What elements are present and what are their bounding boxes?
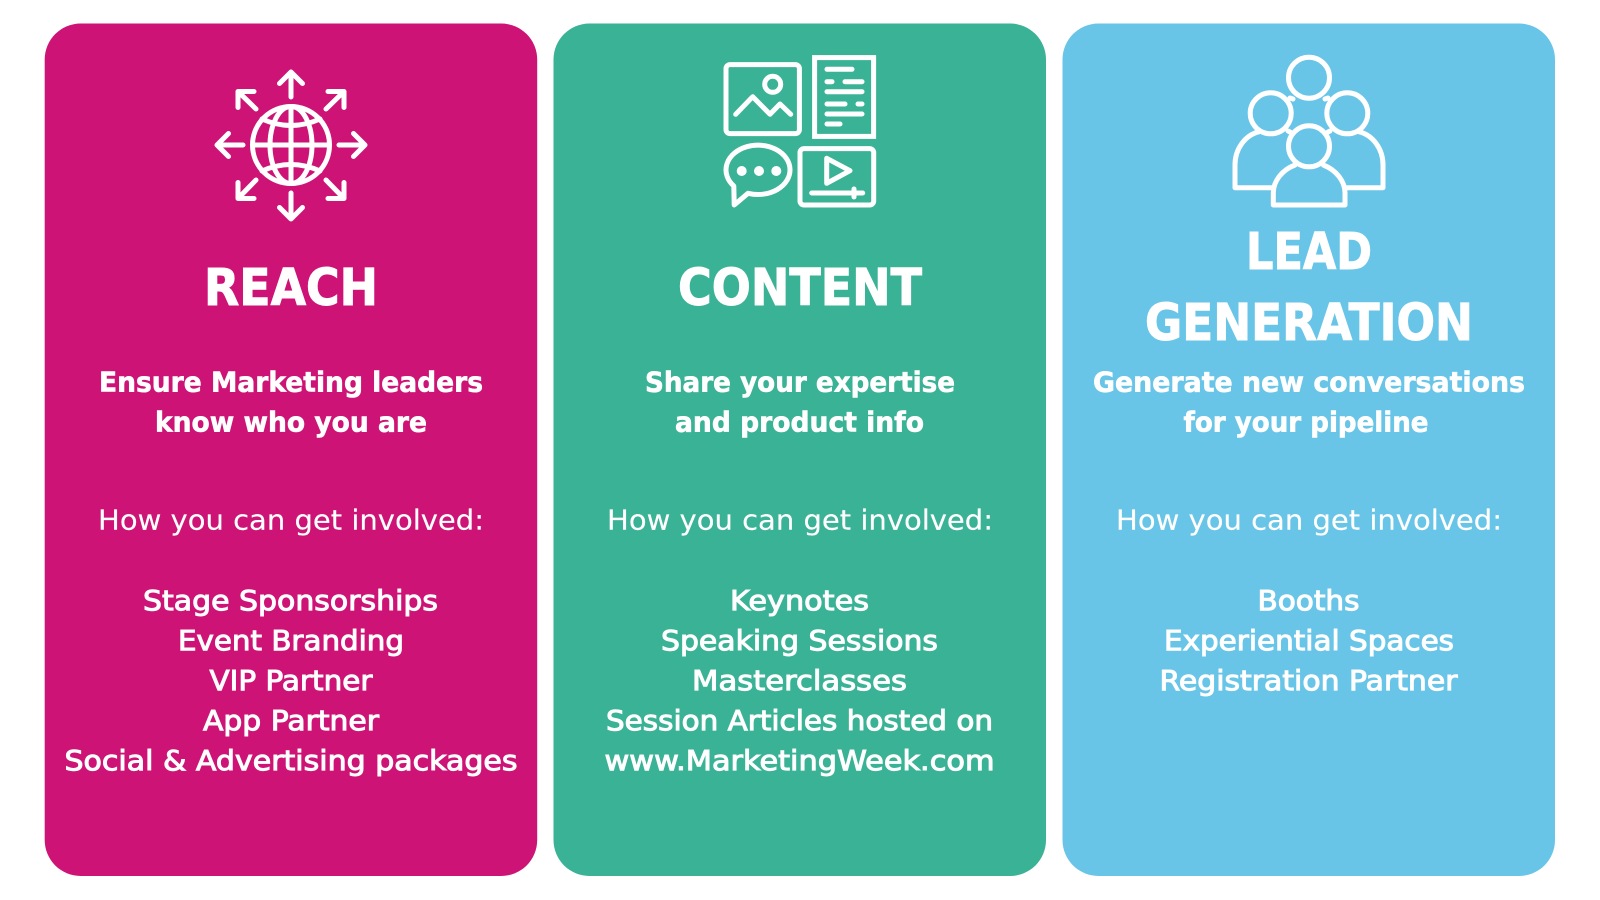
reach card background <box>45 24 537 876</box>
list: reach options: Event Branding <box>178 625 404 657</box>
list: content options: Keynotes <box>730 585 869 617</box>
heading: lead generation: GENERATION <box>1145 294 1473 353</box>
subheading: reach <box>99 366 483 438</box>
heading: content: CONTENT <box>678 259 922 318</box>
list: lead generation options: Booths <box>1258 585 1360 617</box>
list: content options <box>604 585 994 777</box>
prompt: how to get involved: How you can get involved: <box>1116 504 1502 536</box>
list: reach options <box>64 585 518 777</box>
icon: group of people <box>1235 57 1383 205</box>
icon: media content tiles <box>726 58 874 205</box>
panel: lead generation <box>1062 24 1555 876</box>
subheading: content: Share your expertise <box>645 366 955 398</box>
subheading: content: and product info <box>675 406 924 438</box>
list: reach options: App Partner <box>203 705 380 737</box>
heading: lead generation: LEAD <box>1246 223 1372 282</box>
list: reach options: VIP Partner <box>210 665 373 697</box>
prompt: how to get involved: How you can get involved: <box>98 504 484 536</box>
subheading: content <box>645 366 955 438</box>
subheading: lead generation: for your pipeline <box>1184 406 1428 438</box>
panel: reach <box>45 24 537 876</box>
subheading: reach: know who you are <box>155 406 427 438</box>
heading: reach: REACH <box>204 259 378 318</box>
content card background <box>554 24 1046 876</box>
list: reach options: Social & Advertising packages <box>64 745 518 777</box>
list: content options: Session Articles hosted on <box>606 705 993 737</box>
heading: lead generation <box>1145 223 1473 353</box>
list: reach options: Stage Sponsorships <box>143 585 438 617</box>
list: content options: Masterclasses <box>692 665 907 697</box>
prompt: how to get involved: How you can get involved: <box>607 504 993 536</box>
icon: globe with outward arrows <box>217 72 365 219</box>
list: lead generation options <box>1160 585 1458 697</box>
subheading: lead generation: Generate new conversations <box>1093 366 1525 398</box>
list: content options: www.MarketingWeek.com <box>604 745 994 777</box>
subheading: lead generation <box>1093 366 1525 438</box>
list: lead generation options: Registration Partner <box>1160 665 1458 697</box>
lead generation card background <box>1062 24 1555 876</box>
panel: content <box>554 24 1046 876</box>
subheading: reach: Ensure Marketing leaders <box>99 366 483 398</box>
list: lead generation options: Experiential Spaces <box>1164 625 1454 657</box>
list: content options: Speaking Sessions <box>661 625 938 657</box>
